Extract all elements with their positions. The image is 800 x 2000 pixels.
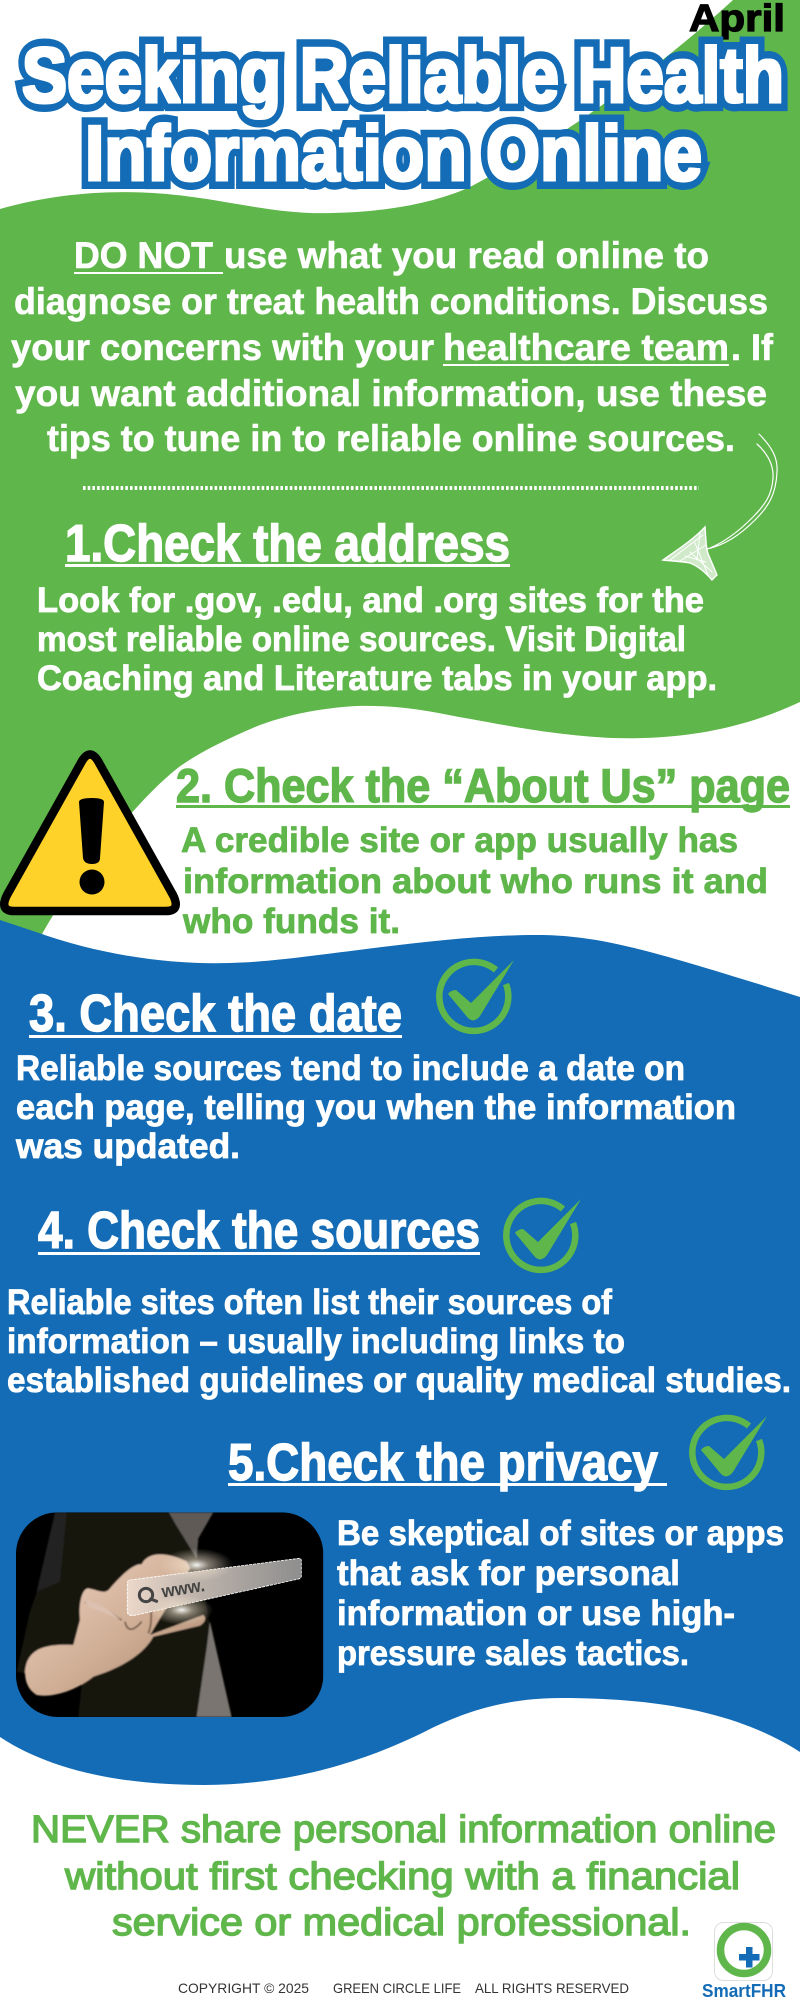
intro text block: use what you read online to: [224, 235, 709, 276]
title: [22, 31, 784, 197]
tip 2 body: A credible site or app usually has: [181, 821, 738, 860]
copyright line: [178, 1980, 629, 1996]
tip 3 body: Reliable sources tend to include a date on: [16, 1049, 685, 1088]
tip 1 heading: 1.Check the address: [65, 515, 510, 573]
tip 1 body: most reliable online sources. Visit Digital: [37, 620, 686, 659]
tip 5 body: that ask for personal: [337, 1554, 680, 1593]
closing warning text: [31, 1809, 776, 1944]
tip 5 body: Be skeptical of sites or apps: [337, 1514, 784, 1553]
title: Information Online: [85, 109, 702, 197]
tip 4 body: [7, 1283, 791, 1400]
icon: check mark 3: [439, 960, 514, 1031]
icon: check mark 5: [692, 1416, 767, 1487]
icon: warning triangle: [4, 754, 176, 911]
closing warning text: without first checking with a financial: [64, 1856, 740, 1898]
closing warning text: service or medical professional.: [112, 1902, 691, 1944]
intro text block: DO NOT: [74, 235, 213, 276]
intro text block: healthcare team: [443, 327, 729, 368]
arrow: hand-drawn pointing to first tip: [663, 434, 777, 580]
photo: hand holding search bar: www.: [159, 1575, 206, 1602]
tip 4: check the sources: [7, 1202, 791, 1400]
intro text block: . If: [731, 327, 774, 368]
tip 4 body: information – usually including links to: [7, 1322, 625, 1361]
tip 1 body: Coaching and Literature tabs in your app.: [37, 659, 717, 698]
icon: check mark 4: [506, 1199, 581, 1270]
intro text block: [11, 235, 774, 459]
tip 5: check the privacy: [228, 1434, 784, 1673]
intro text block: tips to tune in to reliable online sources.: [47, 418, 735, 459]
tip 1 body: [37, 581, 717, 698]
tip 3 heading: 3. Check the date: [29, 985, 402, 1043]
tip 3: check the date: [15, 985, 736, 1166]
tip 4 heading: 4. Check the sources: [38, 1202, 480, 1260]
copyright line: ALL RIGHTS RESERVED: [475, 1980, 629, 1996]
tip 5 body: [337, 1514, 784, 1673]
copyright line: GREEN CIRCLE LIFE: [333, 1980, 461, 1996]
background: green panel: [0, 0, 800, 945]
tip 1: check the address: [37, 515, 717, 698]
tip 4 body: Reliable sites often list their sources of: [7, 1283, 612, 1322]
tip 5 heading: 5.Check the privacy: [228, 1434, 658, 1492]
tip 3 body: each page, telling you when the information: [16, 1088, 736, 1127]
tip 5 body: information or use high-: [337, 1594, 735, 1633]
tip 2 body: [181, 821, 768, 941]
background: blue panel: [0, 920, 800, 1785]
tip 3 body: [15, 1049, 736, 1166]
logo: SmartFHR: [702, 1922, 786, 2000]
intro text block: diagnose or treat health conditions. Discuss: [14, 281, 768, 322]
tip 1 body: Look for .gov, .edu, and .org sites for the: [37, 581, 704, 620]
tip 5 body: pressure sales tactics.: [337, 1634, 689, 1673]
tip 2: check the about us page: [176, 759, 790, 941]
photo: hand holding search bar: [16, 1512, 323, 1717]
copyright line: COPYRIGHT © 2025: [178, 1980, 309, 1996]
tip 3 body: was updated.: [15, 1127, 240, 1166]
closing warning text: NEVER share personal information online: [31, 1809, 776, 1851]
intro text block: your concerns with your: [11, 327, 434, 368]
tip 2 body: who funds it.: [182, 902, 400, 941]
intro text block: you want additional information, use these: [15, 373, 767, 414]
tip 2 body: information about who runs it and: [183, 862, 768, 901]
